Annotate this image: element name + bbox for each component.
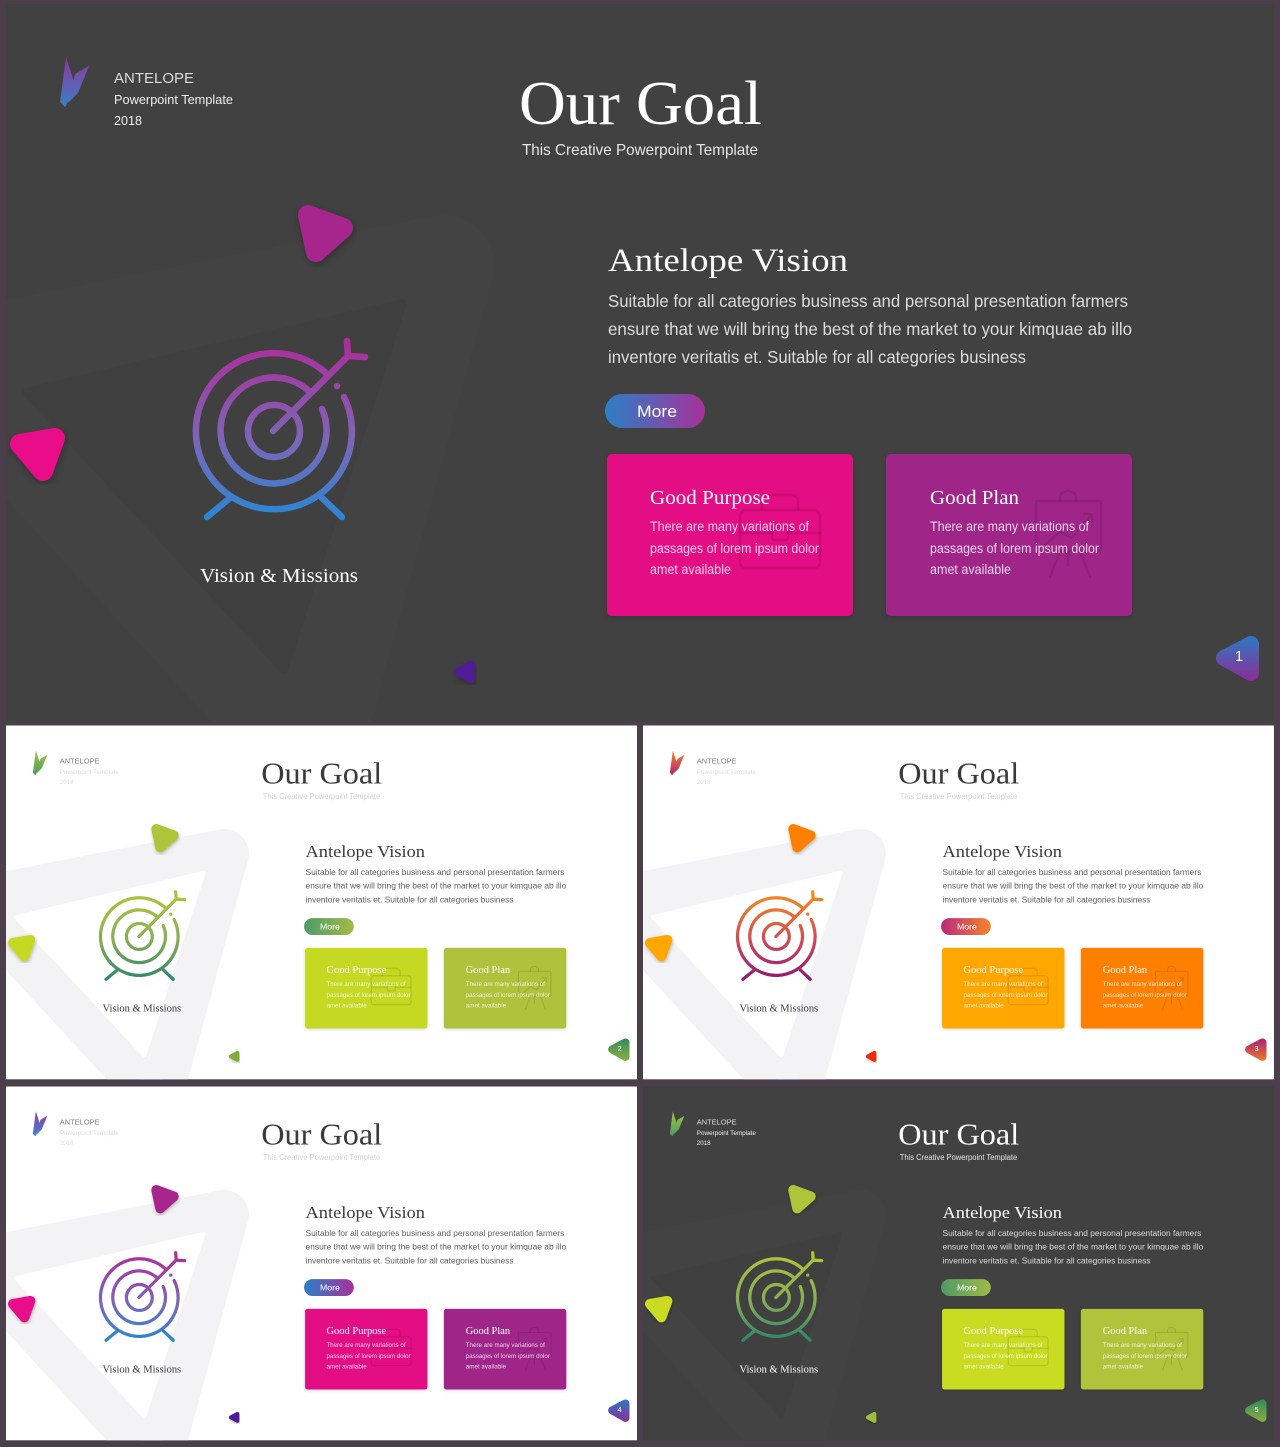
title: Our Goal bbox=[261, 757, 382, 791]
card: Good Purpose: Good Purpose bbox=[963, 965, 1024, 976]
title: Our Goal bbox=[898, 757, 1019, 791]
brand text: Powerpoint Template bbox=[697, 1130, 756, 1137]
button: More bbox=[304, 918, 354, 935]
accent triangle: left bbox=[13, 1301, 30, 1317]
card: Good Purpose: amet available bbox=[326, 1003, 367, 1010]
title: Our Goal bbox=[261, 1118, 382, 1152]
icon: target with arrow bbox=[737, 892, 822, 979]
card: Good Purpose: passages of lorem ipsum dolor bbox=[326, 992, 411, 999]
brand text: ANTELOPE bbox=[60, 1117, 100, 1126]
button: More bbox=[941, 918, 991, 935]
icon: target with arrow bbox=[196, 341, 365, 517]
brand text: 2018 bbox=[697, 1140, 711, 1147]
accent triangle: small bbox=[231, 1414, 237, 1421]
brand text: ANTELOPE bbox=[114, 70, 194, 87]
card: Good Purpose: amet available bbox=[963, 1003, 1004, 1010]
background triangle outline bbox=[0, 1215, 224, 1447]
brand text: Powerpoint Template bbox=[114, 92, 233, 107]
subtitle: This Creative Powerpoint Template bbox=[522, 142, 758, 159]
body text bbox=[943, 1228, 1203, 1266]
body text: Suitable for all categories business and personal presentation farmers bbox=[943, 867, 1202, 877]
button: More: More bbox=[957, 1283, 977, 1293]
accent triangle: small bbox=[458, 665, 471, 679]
page number badge bbox=[1224, 644, 1251, 673]
body text: inventore veritatis et. Suitable for all categories business bbox=[943, 895, 1151, 905]
button: More: More bbox=[320, 922, 340, 932]
body text: inventore veritatis et. Suitable for all categories business bbox=[306, 895, 514, 905]
card: Good Purpose: There are many variations of bbox=[963, 1342, 1043, 1349]
brand text: Powerpoint Template bbox=[60, 769, 119, 776]
accent triangle: left bbox=[13, 940, 30, 956]
card: Good Purpose: There are many variations of bbox=[963, 981, 1043, 988]
body text bbox=[608, 291, 1132, 367]
page number badge bbox=[612, 1042, 626, 1057]
background triangle outline bbox=[0, 854, 224, 1098]
card: Good Plan: amet available bbox=[930, 562, 1011, 577]
logo bbox=[33, 750, 47, 775]
card: Good Plan: Good Plan bbox=[466, 1326, 510, 1337]
card: Good Plan: passages of lorem ipsum dolor bbox=[1103, 1353, 1188, 1360]
card: Good Plan bbox=[886, 454, 1132, 616]
brand text bbox=[60, 1117, 119, 1147]
body text: ensure that we will bring the best of the market to your kimquae ab illo bbox=[608, 319, 1132, 339]
brand text: 2018 bbox=[114, 113, 142, 128]
body text: Suitable for all categories business and personal presentation farmers bbox=[608, 291, 1128, 311]
card: Good Plan: passages of lorem ipsum dolor bbox=[930, 541, 1099, 556]
card: Good Plan: passages of lorem ipsum dolor bbox=[466, 1353, 551, 1360]
caption: Vision & Missions bbox=[103, 1004, 181, 1015]
brand text: ANTELOPE bbox=[697, 1117, 737, 1126]
card: Good Plan: There are many variations of bbox=[466, 1342, 545, 1349]
accent triangle: top bbox=[156, 1190, 174, 1208]
heading: Antelope Vision: Antelope Vision bbox=[306, 1203, 425, 1222]
card: Good Purpose bbox=[305, 1309, 427, 1390]
card: Good Plan: Good Plan bbox=[1103, 1326, 1147, 1337]
caption: Vision & Missions bbox=[103, 1365, 181, 1376]
button: More: More bbox=[637, 402, 677, 421]
background triangle outline bbox=[614, 1215, 861, 1447]
page number badge bbox=[1249, 1042, 1263, 1057]
brand text: 2018 bbox=[697, 779, 711, 786]
brand text: 2018 bbox=[60, 779, 74, 786]
accent triangle: small bbox=[231, 1053, 237, 1060]
brand text: ANTELOPE bbox=[60, 756, 100, 765]
body text bbox=[943, 867, 1203, 905]
body text: ensure that we will bring the best of the market to your kimquae ab illo bbox=[306, 881, 566, 891]
accent triangle: top bbox=[156, 829, 174, 847]
body text: ensure that we will bring the best of the market to your kimquae ab illo bbox=[306, 1242, 566, 1252]
body text bbox=[306, 867, 566, 905]
card: Good Purpose bbox=[607, 454, 853, 616]
button: More bbox=[605, 394, 705, 428]
card: Good Purpose: There are many variations of bbox=[326, 1342, 406, 1349]
subtitle: This Creative Powerpoint Template bbox=[263, 1153, 381, 1162]
page number badge: 5 bbox=[1254, 1405, 1259, 1414]
card: Good Purpose: There are many variations of bbox=[326, 981, 406, 988]
accent triangle: top bbox=[793, 829, 811, 847]
page number badge bbox=[1249, 1403, 1263, 1418]
card: Good Purpose: passages of lorem ipsum dolor bbox=[963, 992, 1048, 999]
brand text: Powerpoint Template bbox=[60, 1130, 119, 1137]
button: More bbox=[304, 1279, 354, 1296]
accent triangle: small bbox=[868, 1414, 874, 1421]
subtitle: This Creative Powerpoint Template bbox=[900, 792, 1018, 801]
heading: Antelope Vision: Antelope Vision bbox=[943, 842, 1062, 861]
card: Good Plan: There are many variations of bbox=[1103, 981, 1182, 988]
card: Good Purpose: Good Purpose bbox=[326, 1326, 387, 1337]
logo bbox=[60, 57, 89, 107]
heading: Antelope Vision: Antelope Vision bbox=[306, 842, 425, 861]
card: Good Purpose: There are many variations of bbox=[650, 519, 809, 534]
slide 2: white green theme bbox=[0, 726, 637, 1098]
body text: ensure that we will bring the best of the market to your kimquae ab illo bbox=[943, 1242, 1203, 1252]
card: Good Purpose: passages of lorem ipsum dolor bbox=[326, 1353, 411, 1360]
button: More: More bbox=[320, 1283, 340, 1293]
title: Our Goal bbox=[519, 70, 762, 138]
accent triangle: left bbox=[650, 1301, 667, 1317]
brand text: Powerpoint Template bbox=[697, 769, 756, 776]
card: Good Plan: amet available bbox=[466, 1364, 506, 1371]
card: Good Plan bbox=[1081, 948, 1203, 1029]
brand text bbox=[697, 1117, 756, 1147]
card: Good Purpose: amet available bbox=[326, 1364, 367, 1371]
body text: Suitable for all categories business and personal presentation farmers bbox=[306, 1228, 565, 1238]
slide 3: white orange theme bbox=[614, 726, 1274, 1098]
card: Good Plan bbox=[444, 948, 566, 1029]
brand text: 2018 bbox=[60, 1140, 74, 1147]
subtitle: This Creative Powerpoint Template bbox=[263, 792, 381, 801]
card: Good Purpose: amet available bbox=[650, 562, 731, 577]
page number badge: 3 bbox=[1254, 1044, 1259, 1053]
card: Good Plan: Good Plan bbox=[930, 487, 1019, 509]
body text: Suitable for all categories business and personal presentation farmers bbox=[306, 867, 565, 877]
page number badge bbox=[612, 1403, 626, 1418]
card: Good Purpose: Good Purpose bbox=[650, 487, 770, 509]
body text: inventore veritatis et. Suitable for all categories business bbox=[943, 1256, 1151, 1266]
card: Good Plan bbox=[444, 1309, 566, 1390]
card: Good Plan bbox=[1081, 1309, 1203, 1390]
brand text bbox=[114, 70, 233, 128]
card: Good Purpose: passages of lorem ipsum dolor bbox=[963, 1353, 1048, 1360]
background triangle outline bbox=[614, 854, 861, 1098]
card: Good Plan: passages of lorem ipsum dolor bbox=[466, 992, 551, 999]
logo bbox=[670, 750, 684, 775]
accent triangle: left bbox=[650, 940, 667, 956]
icon: target with arrow bbox=[737, 1253, 822, 1340]
heading: Antelope Vision: Antelope Vision bbox=[943, 1203, 1062, 1222]
caption: Vision & Missions bbox=[740, 1365, 818, 1376]
card: Good Plan: Good Plan bbox=[466, 965, 510, 976]
page number badge: 1 bbox=[1235, 648, 1243, 665]
body text: ensure that we will bring the best of the market to your kimquae ab illo bbox=[943, 881, 1203, 891]
card: Good Plan: There are many variations of bbox=[466, 981, 545, 988]
background triangle outline bbox=[0, 265, 444, 755]
accent triangle: top bbox=[793, 1190, 811, 1208]
slide 1: large dark purple theme bbox=[0, 4, 1274, 755]
page number badge: 4 bbox=[617, 1405, 622, 1414]
accent triangle: small bbox=[868, 1053, 874, 1060]
body text: Suitable for all categories business and personal presentation farmers bbox=[943, 1228, 1202, 1238]
card: Good Purpose bbox=[942, 948, 1064, 1029]
slide 5: dark green theme bbox=[614, 1086, 1274, 1447]
icon: target with arrow bbox=[100, 892, 185, 979]
body text: inventore veritatis et. Suitable for all categories business bbox=[608, 347, 1026, 367]
card: Good Plan: passages of lorem ipsum dolor bbox=[1103, 992, 1188, 999]
body text: inventore veritatis et. Suitable for all categories business bbox=[306, 1256, 514, 1266]
logo bbox=[670, 1111, 684, 1136]
card: Good Plan: amet available bbox=[1103, 1364, 1143, 1371]
button: More bbox=[941, 1279, 991, 1296]
title: Our Goal bbox=[898, 1118, 1019, 1152]
icon: target with arrow bbox=[100, 1253, 185, 1340]
caption: Vision & Missions bbox=[740, 1004, 818, 1015]
caption: Vision & Missions bbox=[200, 565, 358, 587]
card: Good Plan: There are many variations of bbox=[930, 519, 1089, 534]
card: Good Purpose bbox=[942, 1309, 1064, 1390]
brand text bbox=[60, 756, 119, 786]
logo bbox=[33, 1111, 47, 1136]
button: More: More bbox=[957, 922, 977, 932]
slide 4: white purple theme bbox=[0, 1086, 637, 1447]
card: Good Purpose: Good Purpose bbox=[326, 965, 387, 976]
card: Good Plan: Good Plan bbox=[1103, 965, 1147, 976]
card: Good Purpose: Good Purpose bbox=[963, 1326, 1024, 1337]
accent triangle: left bbox=[20, 438, 55, 471]
card: Good Purpose: passages of lorem ipsum dolor bbox=[650, 541, 819, 556]
brand text bbox=[697, 756, 756, 786]
card: Good Plan: amet available bbox=[1103, 1003, 1143, 1010]
card: Good Plan: amet available bbox=[466, 1003, 506, 1010]
accent triangle: top bbox=[308, 215, 343, 252]
page number badge: 2 bbox=[617, 1044, 622, 1053]
subtitle: This Creative Powerpoint Template bbox=[900, 1153, 1018, 1162]
body text bbox=[306, 1228, 566, 1266]
brand text: ANTELOPE bbox=[697, 756, 737, 765]
card: Good Plan: There are many variations of bbox=[1103, 1342, 1182, 1349]
heading: Antelope Vision: Antelope Vision bbox=[608, 243, 848, 279]
card: Good Purpose: amet available bbox=[963, 1364, 1004, 1371]
card: Good Purpose bbox=[305, 948, 427, 1029]
